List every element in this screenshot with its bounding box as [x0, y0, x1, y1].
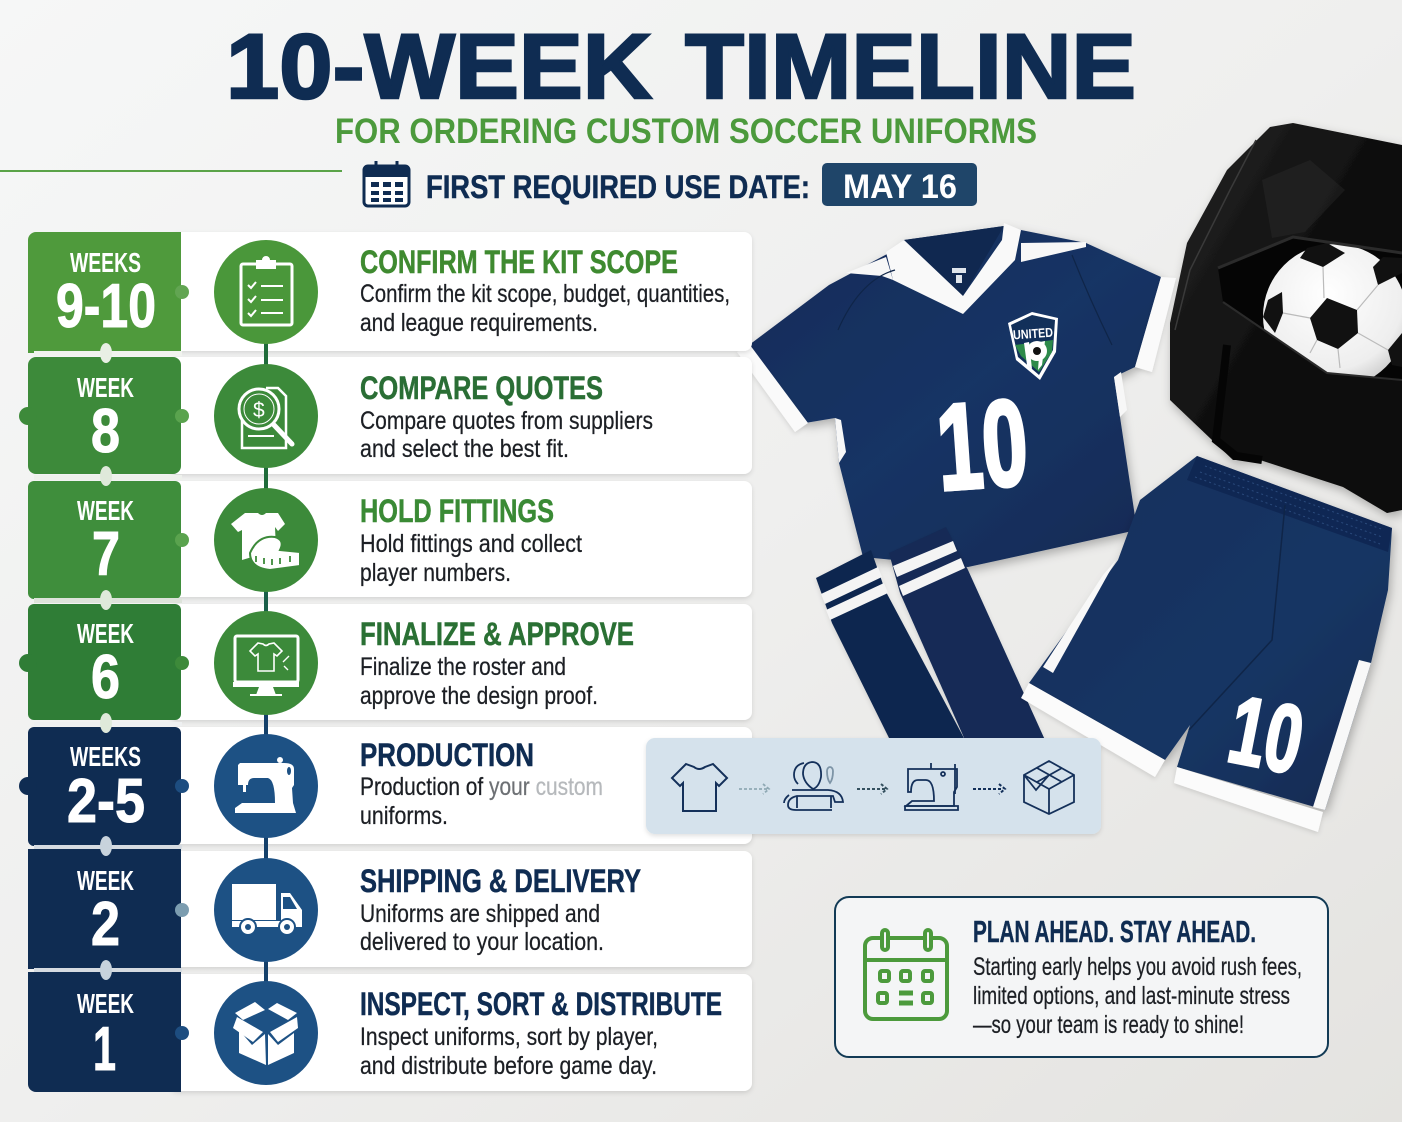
callout body: limited options, and last-minute stress — [973, 982, 1290, 1010]
week block — [19, 727, 189, 846]
text: inspect, sort and distribute: INSPECT, SORT & DISTRIBUTE — [360, 986, 722, 1022]
week block — [28, 481, 189, 599]
text: hold fittings: player numbers. — [360, 559, 511, 587]
text: hold fittings — [360, 493, 582, 587]
date pill: MAY 16 — [843, 168, 957, 206]
icon: calendar small — [364, 161, 409, 206]
week block: 7 — [92, 520, 120, 589]
card — [170, 727, 752, 844]
text: compare quotes: and select the best fit. — [360, 435, 569, 463]
text: hold fittings: Hold fittings and collect — [360, 530, 582, 558]
week block: WEEK — [77, 988, 134, 1019]
week block: 2 — [91, 890, 120, 959]
text: hold fittings: HOLD FITTINGS — [360, 493, 554, 529]
icon: fitting mannequin — [784, 762, 843, 810]
socks — [816, 527, 1045, 740]
icon: shirt outline — [672, 764, 727, 811]
row: weeks 9-10 — [28, 232, 752, 353]
icon: clipboard — [214, 240, 318, 344]
callout body: —so your team is ready to shine! — [973, 1011, 1244, 1039]
date pill — [822, 163, 977, 206]
week block: 6 — [91, 643, 120, 712]
text: confirm the kit scope: CONFIRM THE KIT SCOPE — [360, 244, 678, 280]
soccer ball — [1263, 243, 1402, 388]
week block: WEEKS — [70, 741, 141, 772]
text: compare quotes: COMPARE QUOTES — [360, 370, 603, 406]
week block — [19, 357, 189, 474]
text: shipping and delivery: Uniforms are shipped and — [360, 900, 600, 928]
text: compare quotes: Compare quotes from suppliers — [360, 407, 653, 435]
text: confirm the kit scope: and league requirements. — [360, 309, 598, 337]
text: inspect, sort and distribute — [360, 986, 722, 1080]
connector line — [264, 340, 268, 986]
row: week 1 — [28, 972, 752, 1092]
icon: monitor with shirt — [214, 611, 318, 715]
icon: sewing machine outline — [905, 763, 958, 810]
text: confirm the kit scope — [360, 244, 730, 337]
text: finalize and approve: Finalize the roster and — [360, 653, 566, 681]
week block: WEEK — [77, 618, 134, 649]
text: finalize and approve: FINALIZE & APPROVE — [360, 616, 634, 652]
card — [170, 851, 752, 967]
text: finalize and approve — [360, 616, 634, 710]
week block — [28, 972, 189, 1092]
card — [170, 357, 752, 474]
callout: plan ahead — [835, 897, 1328, 1057]
jersey — [737, 223, 1176, 567]
row: weeks 2-5 — [19, 727, 752, 846]
text: inspect, sort and distribute: and distribute before game day. — [360, 1052, 657, 1080]
shorts number: 10 — [1221, 676, 1312, 795]
week block: WEEK — [77, 372, 134, 403]
text: production: uniforms. — [360, 802, 448, 830]
text: inspect, sort and distribute: Inspect uniforms, sort by player, — [360, 1023, 658, 1051]
timeline — [19, 232, 752, 1092]
shorts number — [1221, 676, 1312, 795]
week block: 2-5 — [67, 767, 145, 836]
arrow 3 — [973, 784, 1005, 794]
row: week 8 — [19, 357, 752, 474]
icon: sewing machine — [214, 734, 318, 838]
row: week 6 — [19, 604, 752, 720]
title: TIMELINE — [685, 16, 1136, 118]
date label: FIRST REQUIRED USE DATE: — [426, 169, 810, 205]
panel: production steps — [646, 738, 1101, 834]
text: production — [360, 737, 603, 830]
week block — [28, 849, 189, 969]
row: week 2 — [28, 849, 752, 969]
title — [226, 16, 1136, 118]
callout heading: PLAN AHEAD. STAY AHEAD. — [973, 914, 1256, 949]
text: production: PRODUCTION — [360, 737, 534, 773]
kit photo illustration — [737, 123, 1402, 832]
row: week 7 — [28, 481, 752, 599]
decorative rule left — [0, 170, 342, 172]
shorts — [1021, 456, 1392, 832]
arrow 2 — [857, 784, 887, 794]
text: shipping and delivery: delivered to your location. — [360, 928, 604, 956]
crest: UNITED — [1013, 325, 1054, 342]
week block: WEEKS — [70, 247, 141, 278]
card — [170, 481, 752, 597]
week block: WEEK — [77, 495, 134, 526]
text: shipping and delivery: SHIPPING & DELIVERY — [360, 863, 641, 899]
icon: delivery truck — [214, 858, 318, 962]
callout body — [973, 953, 1302, 1039]
text: production: Production of your custom — [360, 773, 603, 801]
card — [170, 604, 752, 720]
title: 10-WEEK — [226, 16, 652, 118]
subtitle: FOR ORDERING CUSTOM SOCCER UNIFORMS — [335, 112, 1037, 151]
week block: 9-10 — [56, 272, 156, 341]
text: confirm the kit scope: Confirm the kit scope, budget, quantities, — [360, 280, 730, 308]
jersey number: 10 — [933, 374, 1032, 516]
week block: 1 — [93, 1015, 116, 1084]
text: compare quotes — [360, 370, 653, 463]
header date row — [364, 161, 977, 206]
text: shipping and delivery — [360, 863, 641, 956]
week block: 8 — [91, 397, 120, 466]
week block — [28, 232, 189, 353]
week block separators — [34, 343, 182, 980]
week block: WEEK — [77, 865, 134, 896]
icon: box outline — [1024, 761, 1074, 814]
icon: calendar large — [865, 930, 947, 1019]
text: finalize and approve: approve the design proof. — [360, 682, 598, 710]
jersey number — [933, 374, 1032, 516]
arrow 1 — [739, 784, 769, 794]
crest — [1008, 312, 1058, 380]
icon: magnifier over quote: $ — [253, 399, 265, 422]
week block — [19, 604, 189, 720]
card — [170, 232, 752, 351]
icon: shirt and tape — [214, 488, 318, 592]
icon: magnifier over quote — [214, 364, 318, 468]
card — [170, 974, 752, 1091]
duffel bag with ball — [1170, 123, 1402, 513]
icon: open box — [214, 981, 318, 1085]
